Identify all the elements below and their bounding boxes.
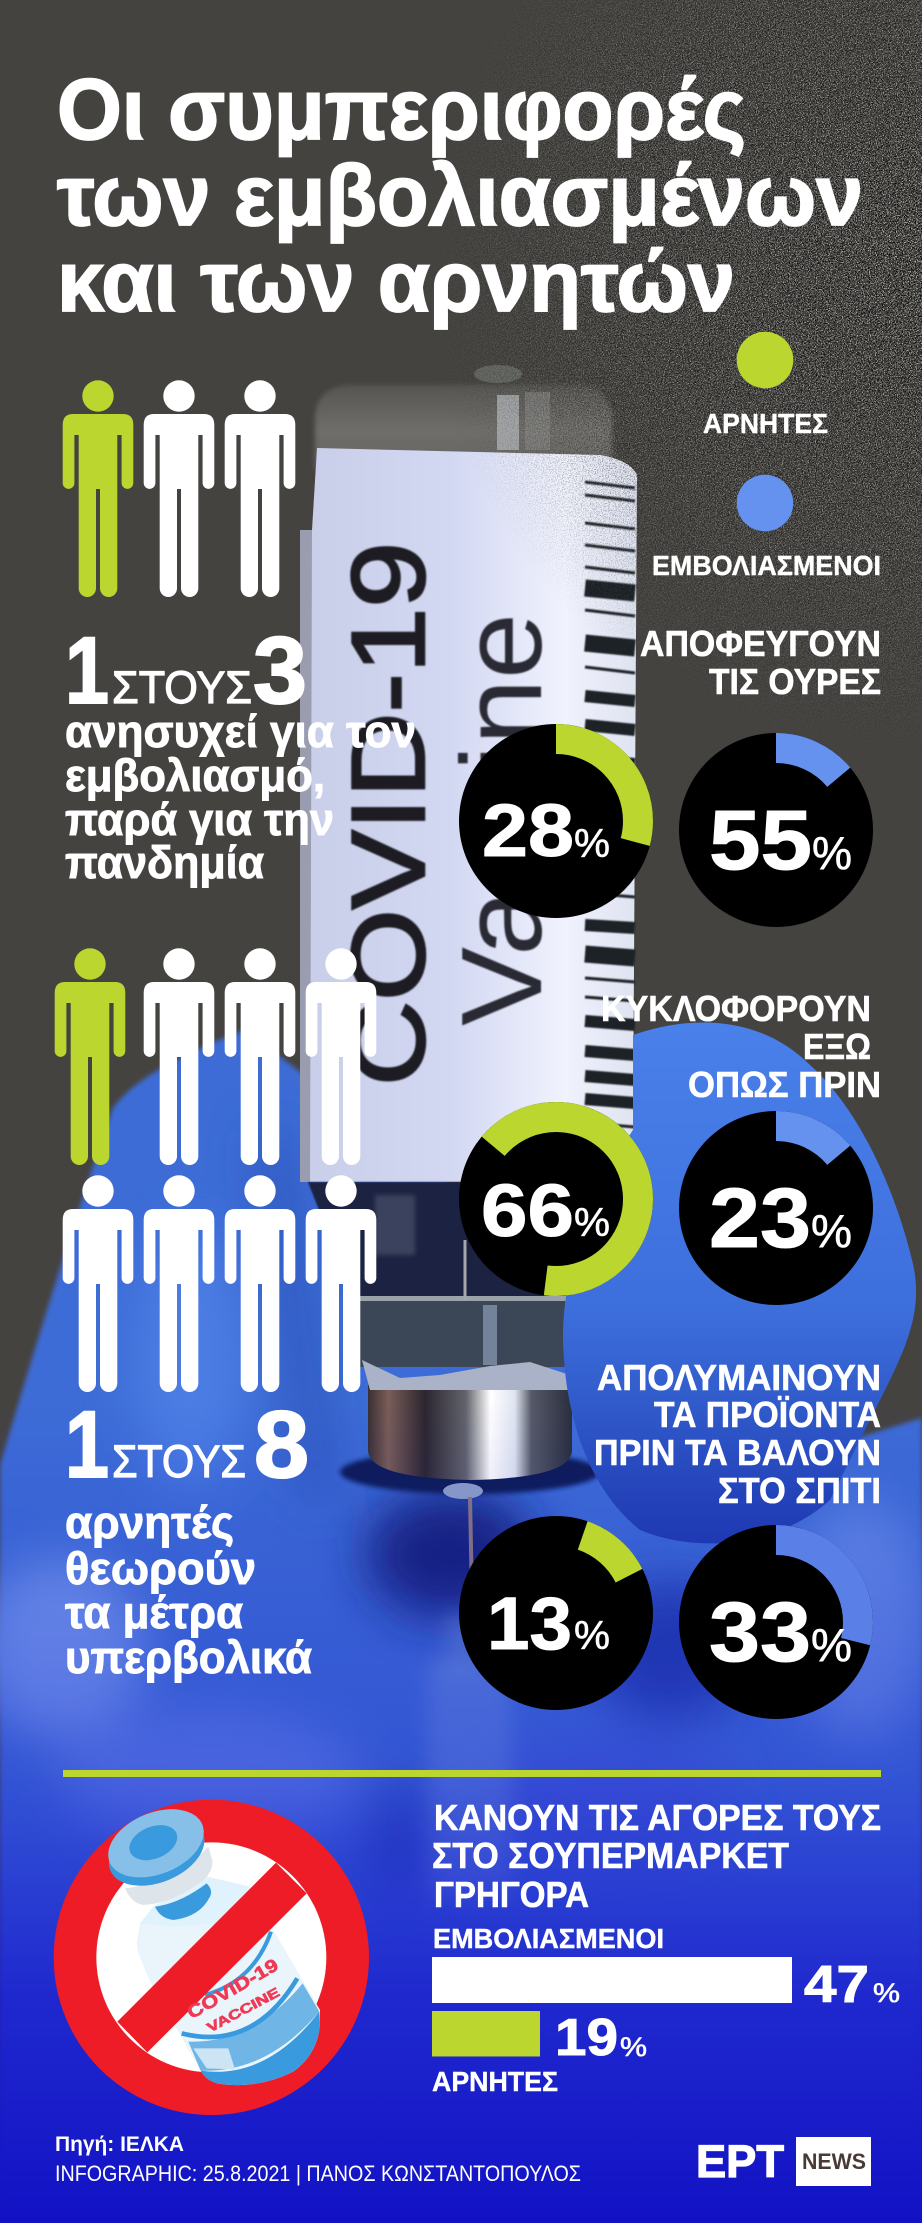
source and credits [55, 2133, 581, 2186]
donut: 66% refusers: 66 [481, 1169, 574, 1252]
heading: shop quickly: ΣΤΟ ΣΟΥΠΕΡΜΑΡΚΕΤ [432, 1835, 789, 1876]
stat: 1 in 8: 8 [254, 1392, 309, 1498]
stat: 1 in 3 [65, 618, 307, 724]
heading: go out as before: ΚΥΚΛΟΦΟΡΟΥΝ [601, 988, 871, 1029]
heading: wash products [594, 1357, 881, 1511]
donut: 28% refusers [459, 724, 653, 918]
bar: refusers 19% [432, 2011, 540, 2056]
donut: 33% vaccinated [679, 1525, 873, 1719]
stat: 1 in 3: ΣΤΟΥΣ [112, 662, 252, 713]
text: worried about vaccination: εμβολιασμό, [65, 750, 325, 801]
donut: 66% refusers: % [574, 1201, 610, 1245]
text: worried about vaccination: πανδημία [65, 837, 264, 888]
bar chart: shopping quickly: ΑΡΝΗΤΕΣ [432, 2066, 558, 2097]
donut: 23% vaccinated: % [811, 1205, 852, 1257]
donut: 55% vaccinated [679, 733, 873, 927]
label text: COVID-19: COVID-19 [331, 542, 447, 1086]
vial text: COVID-19 [184, 1955, 282, 2023]
vial neck [155, 1883, 211, 1920]
heading: go out as before: ΟΠΩΣ ΠΡΙΝ [688, 1064, 881, 1105]
heading: shop quickly: ΚΑΝΟΥΝ ΤΙΣ ΑΓΟΡΕΣ ΤΟΥΣ [434, 1797, 881, 1838]
pictogram: 1 in 3 people [63, 380, 295, 597]
source and credits: Πηγή: ΙΕΛΚΑ [55, 2133, 184, 2156]
bar chart: shopping quickly: 19 [555, 2009, 618, 2067]
prohibition bar [117, 1863, 307, 2052]
heading: avoid queues [640, 623, 881, 702]
stat: 1 in 8: 1 [65, 1392, 109, 1498]
legend: refusers label: ΑΡΝΗΤΕΣ [703, 408, 828, 439]
vial cap [99, 1805, 215, 1899]
donut: 33% vaccinated: % [811, 1619, 852, 1671]
bar: vaccinated 47% [432, 1957, 792, 2003]
legend: vaccinated label: ΕΜΒΟΛΙΑΣΜΕΝΟΙ [652, 550, 881, 581]
heading: go out as before [601, 988, 881, 1105]
logo: ERT News [696, 2136, 871, 2187]
bar chart: shopping quickly: % [873, 1978, 900, 2008]
vial collar [125, 1847, 213, 1905]
heading: wash products: ΣΤΟ ΣΠΙΤΙ [718, 1470, 881, 1511]
glove: folds and shadows [0, 1130, 922, 1900]
donut: 23% vaccinated [679, 1111, 873, 1305]
label text: Vaccine: Vaccine [439, 613, 566, 1026]
heading: avoid queues: ΤΙΣ ΟΥΡΕΣ [709, 661, 881, 702]
vial glass top [315, 365, 612, 470]
text: refusers consider measures excessive [65, 1497, 312, 1683]
donut: 13% refusers: 13 [487, 1582, 572, 1665]
barcode [585, 482, 635, 1127]
donut: 28% refusers: % [574, 822, 610, 866]
text: worried about vaccination [65, 706, 416, 888]
title: και των αρνητών [57, 234, 735, 330]
donut: 13% refusers: % [574, 1614, 610, 1658]
text: refusers consider measures excessive: τα μέτρα [65, 1587, 243, 1638]
legend: vaccinated dot [737, 475, 793, 531]
donut: 55% vaccinated: 55 [709, 793, 812, 887]
text: refusers consider measures excessive: υπερβολικά [65, 1632, 312, 1683]
icon: crossed-out vaccine vial [54, 1796, 369, 2115]
bar chart: shopping quickly: % [620, 2032, 647, 2062]
text: worried about vaccination: παρά για την [65, 794, 334, 845]
glove: palm and lower hand [0, 1030, 922, 2223]
text: refusers consider measures excessive: αρνητές [65, 1497, 234, 1548]
heading: go out as before: ΕΞΩ [803, 1026, 871, 1067]
legend [652, 332, 881, 581]
bar chart: shopping quickly: ΕΜΒΟΛΙΑΣΜΕΝΟΙ [433, 1923, 664, 1954]
text: refusers consider measures excessive: θεωρούν [65, 1543, 256, 1594]
vial collar and metal cap [308, 1182, 606, 1650]
text: worried about vaccination: ανησυχεί για τον [65, 706, 416, 757]
donut: 33% vaccinated: 33 [709, 1585, 811, 1679]
stat: 1 in 8 [65, 1392, 309, 1498]
heading: wash products: ΑΠΟΛΥΜΑΙΝΟΥΝ [597, 1357, 881, 1398]
bar chart: shopping quickly [432, 1923, 900, 2097]
heading: shop quickly: ΓΡΗΓΟΡΑ [434, 1874, 589, 1915]
title: των εμβολιασμένων [57, 148, 863, 244]
title [57, 62, 863, 330]
donut: 23% vaccinated: 23 [709, 1171, 811, 1265]
legend: refusers dot [737, 332, 793, 388]
stat: 1 in 3: 1 [65, 618, 109, 724]
stat: 1 in 3: 3 [253, 618, 307, 724]
logo: ERT News: NEWS [802, 2149, 866, 2174]
syringe hub [428, 1615, 512, 1900]
vial label [300, 448, 637, 1182]
title: Οι συμπεριφορές [57, 62, 746, 158]
heading: avoid queues: ΑΠΟΦΕΥΓΟΥΝ [640, 623, 881, 664]
heading: wash products: ΠΡΙΝ ΤΑ ΒΑΛΟΥΝ [594, 1432, 881, 1473]
donut: 55% vaccinated: % [812, 827, 852, 879]
stat: 1 in 8: ΣΤΟΥΣ [112, 1436, 246, 1487]
heading: wash products: ΤΑ ΠΡΟΪΟΝΤΑ [654, 1394, 881, 1435]
donut: 66% refusers [440, 1083, 672, 1315]
donut: 28% refusers: 28 [482, 789, 574, 872]
source and credits: INFOGRAPHIC: 25.8.2021 | ΠΑΝΟΣ ΚΩΝΣΤΑΝΤΟΠΟΥΛΟΣ [55, 2161, 581, 2186]
glove: thumb [563, 1023, 916, 1543]
icon: crossed-out vaccine vial: VACCINE [204, 1984, 282, 2035]
donut: 13% refusers [452, 1509, 660, 1717]
heading: shop quickly [432, 1797, 881, 1915]
pictogram: 1 in 8 people [55, 948, 376, 1392]
vial body [137, 1877, 320, 2085]
bar chart: shopping quickly: 47 [804, 1956, 869, 2014]
logo: ERT News: ΕΡΤ [696, 2136, 784, 2187]
